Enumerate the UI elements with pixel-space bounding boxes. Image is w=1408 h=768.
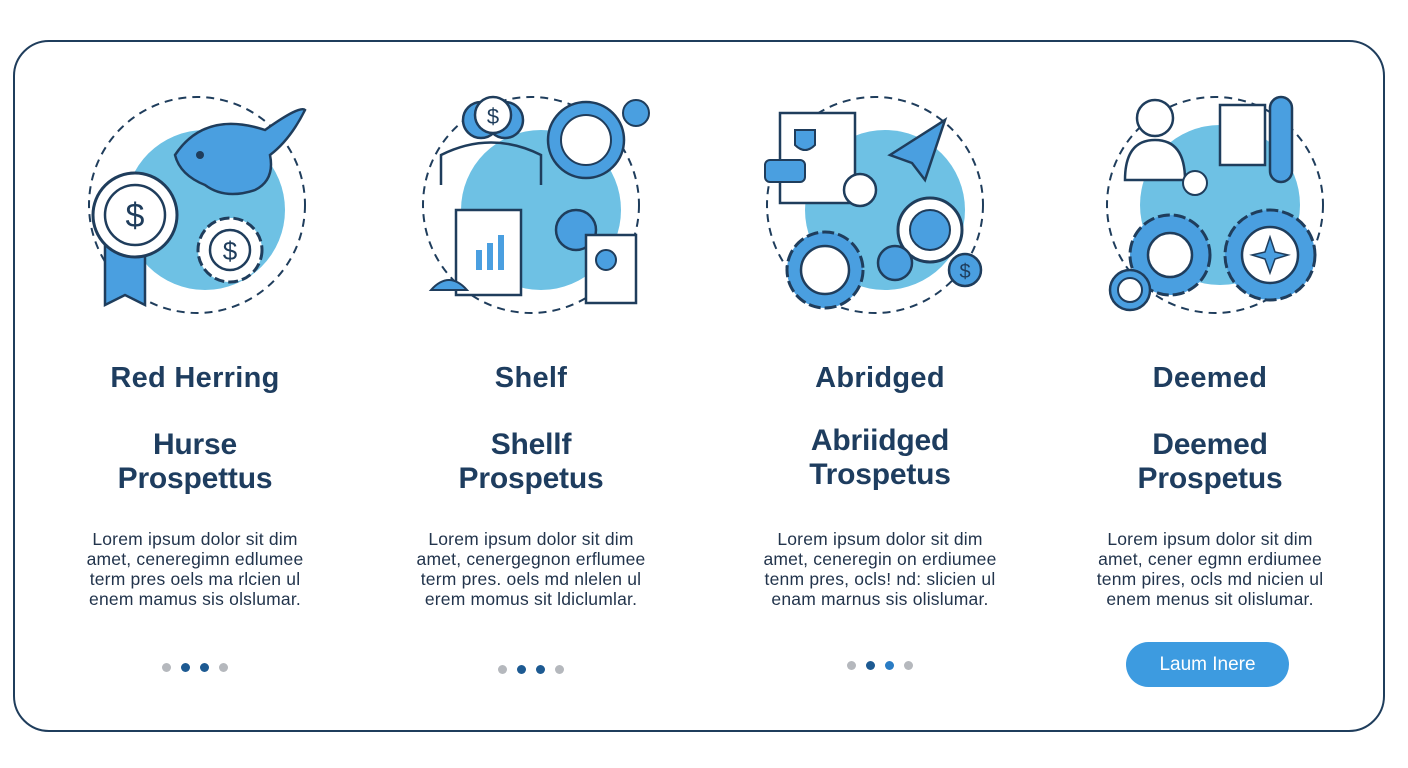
text block: enem mamus sis olslumar. [89,589,301,609]
icon: deemed person, document and gears [1106,96,1324,314]
heading: Red Herring [110,362,280,394]
subheading: Prospetus [1138,462,1282,495]
column 2: Shelf [417,96,650,674]
subheading: Prospettus [118,462,272,495]
text block: tenm pres, ocls! nd: slicien ul [765,569,995,589]
text block: enem menus sit olislumar. [1106,589,1314,609]
button [1126,642,1289,687]
pagination dots [498,665,564,674]
subheading: Shellf [491,428,571,461]
icon: shelf documents and people [422,96,650,314]
subheading [809,424,951,491]
text block: term pres. oels md nlelen ul [421,569,641,589]
text block: Lorem ipsum dolor sit dim [777,529,983,549]
heading: Shelf [495,362,567,394]
heading: Abridged [815,362,945,394]
text block: enam marnus sis olislumar. [771,589,989,609]
text block: erem momus sit ldiclumlar. [425,589,637,609]
text block [417,529,645,609]
text block [1097,529,1323,609]
subheading: Trospetus [809,458,951,491]
text block [763,529,997,609]
subheading [1138,428,1282,495]
text block: amet, ceneregin on erdiumee [763,549,997,569]
icon: shelf documents and people: $ [487,104,499,129]
subheading [118,428,272,495]
text block: amet, cenergegnon erflumee [417,549,645,569]
subheading: Hurse [153,428,237,461]
pagination dots [162,663,228,672]
pagination dots [847,661,913,670]
icon: red herring fish and dollar badges: $ [126,197,145,235]
heading: Deemed [1153,362,1267,394]
column 4: Deemed [1097,96,1324,687]
icon: red herring fish and dollar badges [88,96,306,314]
text block: tenm pires, ocls md nicien ul [1097,569,1323,589]
subheading [459,428,603,495]
column 3: Abridged [763,96,997,670]
button: Laum Inere [1159,654,1256,675]
subheading: Deemed [1152,428,1268,461]
icon: abridged document, plane, gears: $ [959,261,971,283]
text block: term pres oels ma rlcien ul [90,569,300,589]
text block: amet, cener egmn erdiumee [1098,549,1322,569]
text block: amet, ceneregimn edlumee [87,549,303,569]
text block [87,529,303,609]
subheading: Abriidged [811,424,949,457]
icon: abridged document, plane, gears [764,96,984,314]
column 1: Red Herring [87,96,306,672]
text block: Lorem ipsum dolor sit dim [1107,529,1313,549]
subheading: Prospetus [459,462,603,495]
text block: Lorem ipsum dolor sit dim [428,529,634,549]
icon: red herring fish and dollar badges: $ [223,236,238,266]
text block: Lorem ipsum dolor sit dim [92,529,298,549]
